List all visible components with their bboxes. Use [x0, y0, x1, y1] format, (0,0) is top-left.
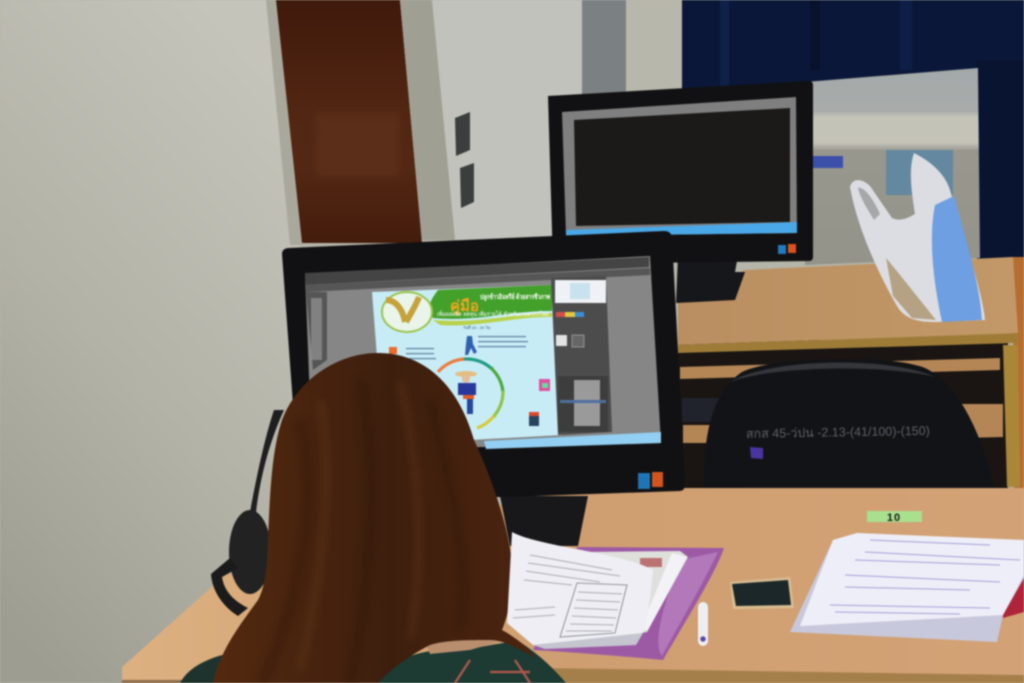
screen: ปลูกข้าวอินทรีย์ ด้วยสารชีวภาพ — [480, 292, 550, 302]
ring diagram — [438, 358, 504, 428]
panel: main monitor — [282, 231, 685, 546]
artboard — [372, 285, 562, 440]
farmer in ring — [455, 371, 477, 414]
panel: handwritten papers — [790, 533, 1024, 642]
icon: pen — [698, 602, 708, 646]
panel: person's hair — [213, 353, 536, 683]
panel: purple folder — [533, 547, 724, 660]
screen — [305, 256, 661, 450]
icon: shopping bag — [539, 379, 550, 391]
label: number 10 tag — [867, 511, 922, 524]
monitor bezel — [282, 231, 685, 500]
green banner — [429, 285, 552, 319]
banner title: คู่มือ — [450, 298, 479, 316]
icon: shop — [529, 412, 539, 426]
panel: white pillar with switches — [400, 0, 682, 240]
panel: black office chair — [704, 359, 994, 488]
tool panel — [306, 292, 327, 370]
panel: brown door — [276, 0, 422, 243]
panel: background wall — [0, 0, 302, 683]
logo — [382, 292, 432, 332]
icon: plastic bag — [850, 153, 985, 322]
screen: เพิ่มผลผลิต ลดทุน เพิ่มรายได้ สำหรับเกษตรกรไทย — [437, 310, 549, 318]
icon: small chalkboard phone — [730, 577, 794, 609]
panel: blue curtain — [682, 0, 1024, 260]
infographic body text: วันที่ 15 - 20 วัน — [463, 325, 491, 330]
panel: orange neighbouring desk — [1013, 257, 1024, 488]
rear monitor screen — [562, 97, 797, 236]
panel: person's neck — [425, 635, 505, 654]
panel: paper stack — [507, 532, 688, 649]
panel: person's shirt — [180, 642, 566, 683]
icon: headphones — [211, 410, 284, 616]
farmer figure small — [465, 336, 477, 355]
printed table on paper — [560, 583, 627, 637]
label: number 10 tag: 10 — [887, 512, 901, 524]
icon: orange box — [389, 347, 397, 354]
panel: grey printer — [805, 68, 980, 265]
taskbar — [484, 432, 661, 449]
panel: front desk — [122, 488, 1024, 683]
monitor stand — [500, 496, 588, 546]
panel: rear monitor — [548, 81, 813, 303]
panel: rear desk — [678, 257, 1020, 488]
chair text label: สกส 45-ว่ปน -2.13-(41/100)-(150) — [746, 424, 930, 441]
right panels — [551, 276, 612, 435]
